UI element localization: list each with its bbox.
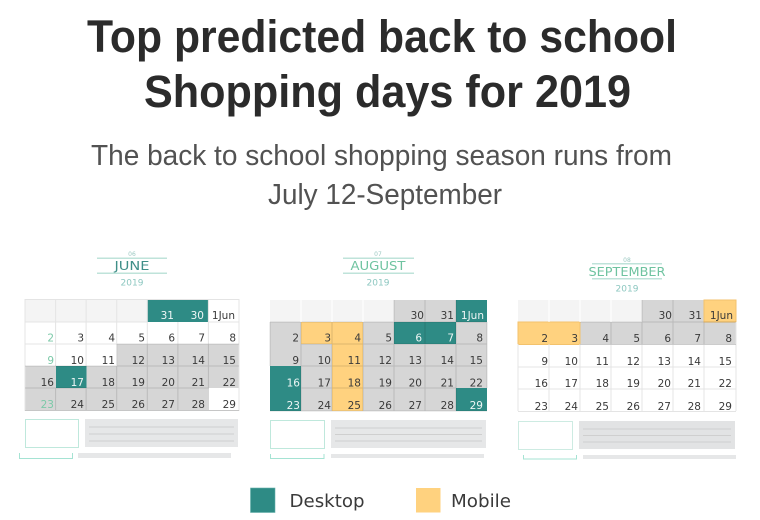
June grid: 25 <box>102 399 115 411</box>
June heading: 06 <box>128 251 136 258</box>
August grid: 4 <box>354 332 361 344</box>
June grid <box>25 300 239 411</box>
subtitle <box>91 140 672 211</box>
August grid: 15 <box>470 355 483 367</box>
June grid: 6 <box>168 332 175 344</box>
August grid: 9 <box>292 355 299 367</box>
August grid: 29 <box>470 400 483 412</box>
June grid: 11 <box>102 355 115 367</box>
June grid: 26 <box>132 399 145 411</box>
September grid: 2 <box>541 333 548 345</box>
August grid: 16 <box>287 378 300 390</box>
September grid <box>518 300 736 413</box>
September grid: 6 <box>664 333 671 345</box>
June grid: 12 <box>132 355 145 367</box>
September grid: 5 <box>633 333 640 345</box>
September grid: 30 <box>659 310 672 322</box>
September grid: 31 <box>689 310 702 322</box>
June grid: 29 <box>223 399 236 411</box>
June heading: 2019 <box>121 278 144 288</box>
August grid: 21 <box>441 378 454 390</box>
August heading: 2019 <box>367 278 390 288</box>
August notes <box>270 420 486 458</box>
September grid: 16 <box>535 378 548 390</box>
June grid: 28 <box>192 399 205 411</box>
panel: August calendar <box>270 251 487 458</box>
August grid: 5 <box>385 332 392 344</box>
June grid: 19 <box>132 377 145 389</box>
August grid: 23 <box>287 400 300 412</box>
August grid: 19 <box>379 378 392 390</box>
August grid: 13 <box>409 355 422 367</box>
August grid: 20 <box>409 378 422 390</box>
June grid: 2 <box>47 332 54 344</box>
August grid: 11 <box>348 355 361 367</box>
August heading: 07 <box>374 251 382 258</box>
panel: September calendar <box>518 257 736 459</box>
legend: desktop: Desktop <box>290 492 364 512</box>
June grid: 13 <box>162 355 175 367</box>
subtitle: The back to school shopping season runs from <box>91 140 672 172</box>
September grid: 29 <box>719 401 732 413</box>
September notes <box>518 421 736 459</box>
June grid: 1Jun <box>212 310 235 322</box>
September grid: 7 <box>694 333 701 345</box>
August grid: 28 <box>441 400 454 412</box>
September grid: 27 <box>658 401 671 413</box>
June grid: 9 <box>47 355 54 367</box>
August grid: 2 <box>292 332 299 344</box>
August grid: 1Jun <box>461 310 484 322</box>
August heading: AUGUST <box>350 259 406 273</box>
September grid: 10 <box>565 356 578 368</box>
August grid: 17 <box>318 378 331 390</box>
September grid: 9 <box>541 356 548 368</box>
legend: mobile <box>416 488 511 512</box>
September grid: 4 <box>602 333 609 345</box>
September grid: 17 <box>565 378 578 390</box>
June heading <box>97 251 167 288</box>
September grid: 13 <box>658 356 671 368</box>
June grid: 14 <box>192 355 205 367</box>
August grid: 18 <box>348 378 361 390</box>
June notes <box>20 419 238 458</box>
September grid: 25 <box>596 401 609 413</box>
August grid: 25 <box>348 400 361 412</box>
panel: June calendar <box>20 251 239 458</box>
September grid: 19 <box>627 378 640 390</box>
September grid: 24 <box>565 401 578 413</box>
August grid: 10 <box>318 355 331 367</box>
June grid: 23 <box>41 399 54 411</box>
September heading: 2019 <box>616 284 639 294</box>
August grid: 24 <box>318 400 331 412</box>
June grid: 24 <box>71 399 84 411</box>
June grid: 17 <box>71 377 84 389</box>
August grid: 8 <box>476 332 483 344</box>
September grid: 28 <box>688 401 701 413</box>
September grid: 11 <box>596 356 609 368</box>
June grid: 10 <box>71 355 84 367</box>
title: Top predicted back to school <box>87 11 677 62</box>
September grid: 23 <box>535 401 548 413</box>
September grid: 26 <box>627 401 640 413</box>
August grid <box>270 300 487 412</box>
June grid: 22 <box>223 377 236 389</box>
August grid: 26 <box>379 400 392 412</box>
September grid: 3 <box>571 333 578 345</box>
September heading: 08 <box>623 257 631 264</box>
June grid: 4 <box>108 332 115 344</box>
September grid: 18 <box>596 378 609 390</box>
September grid: 1Jun <box>710 310 733 322</box>
August grid: 27 <box>409 400 422 412</box>
September heading: SEPTEMBER <box>588 265 666 279</box>
September grid: 22 <box>719 378 732 390</box>
June grid: 3 <box>77 332 84 344</box>
June grid: 5 <box>138 332 145 344</box>
June grid: 31 <box>161 310 174 322</box>
September grid: 20 <box>658 378 671 390</box>
August grid: 6 <box>415 332 422 344</box>
June grid: 21 <box>192 377 205 389</box>
title: Shopping days for 2019 <box>144 66 631 117</box>
June grid: 16 <box>41 377 54 389</box>
August grid: 22 <box>470 378 483 390</box>
August grid: 7 <box>447 332 454 344</box>
June grid: 30 <box>191 310 204 322</box>
June grid: 8 <box>229 332 236 344</box>
June grid: 7 <box>198 332 205 344</box>
August grid: 14 <box>441 355 454 367</box>
August grid: 3 <box>324 332 331 344</box>
August grid: 12 <box>379 355 392 367</box>
September grid: 8 <box>725 333 732 345</box>
September grid: 14 <box>688 356 701 368</box>
title <box>87 11 677 117</box>
August grid: 30 <box>411 310 424 322</box>
September grid: 15 <box>719 356 732 368</box>
June grid: 20 <box>162 377 175 389</box>
June grid: 27 <box>162 399 175 411</box>
subtitle: July 12-September <box>268 179 502 211</box>
September grid: 21 <box>688 378 701 390</box>
September heading <box>588 257 666 294</box>
legend: desktop <box>250 488 364 512</box>
September grid: 12 <box>627 356 640 368</box>
August heading <box>343 251 414 288</box>
June grid: 18 <box>102 377 115 389</box>
August grid: 31 <box>441 310 454 322</box>
legend: mobile: Mobile <box>451 492 511 512</box>
June grid: 15 <box>223 355 236 367</box>
June heading: JUNE <box>113 259 150 273</box>
